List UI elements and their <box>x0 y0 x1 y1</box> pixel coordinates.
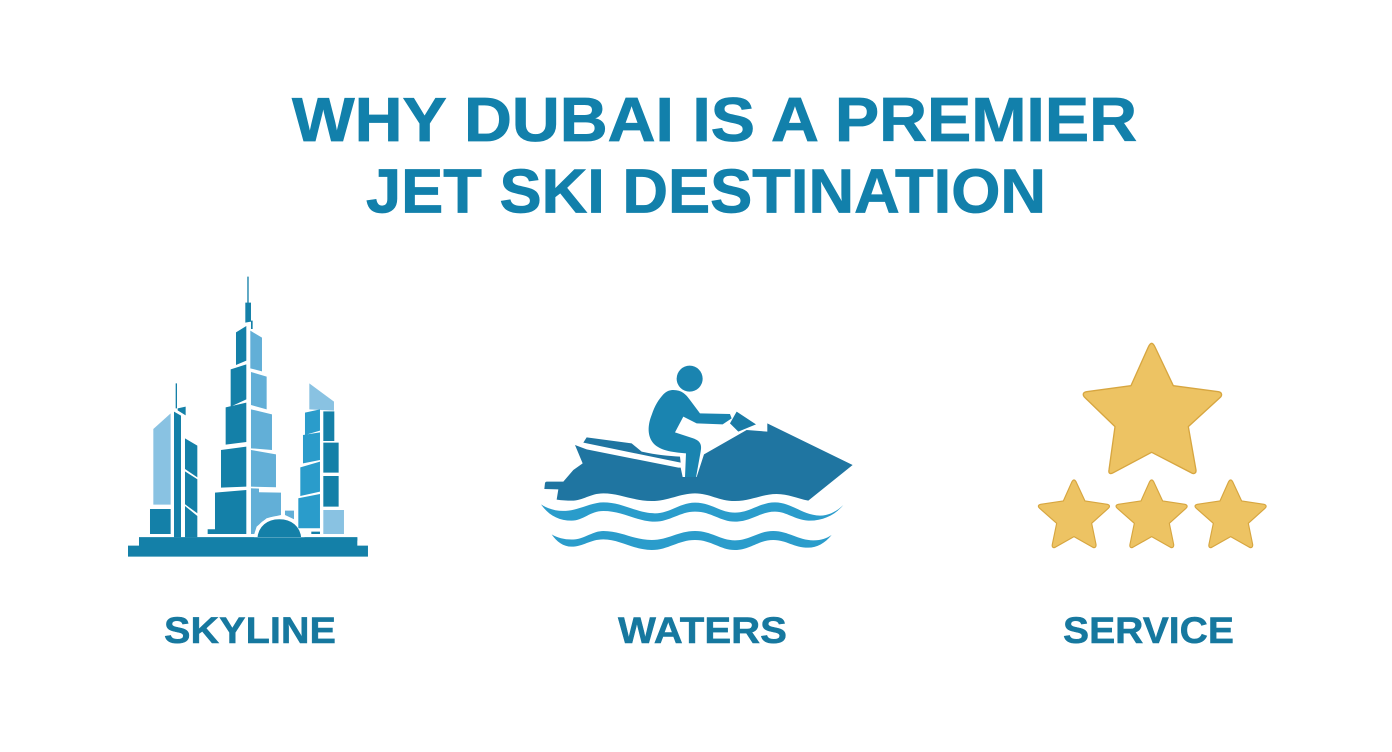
small star middle <box>1116 480 1187 548</box>
wave two <box>552 531 832 550</box>
label: skyline: SKYLINE <box>164 609 336 651</box>
icon: stars <box>1038 343 1266 548</box>
small star right <box>1195 480 1266 548</box>
title: JET SKI DESTINATION <box>366 158 1046 226</box>
label: waters: WATERS <box>618 609 787 651</box>
icon: jet ski rider <box>541 366 853 550</box>
seat <box>583 437 681 463</box>
rider body <box>649 390 732 478</box>
title <box>292 86 1137 226</box>
wave one <box>541 502 843 522</box>
hull <box>544 423 853 501</box>
small star left <box>1038 480 1109 548</box>
title: WHY DUBAI IS A PREMIER <box>292 86 1137 155</box>
label: service: SERVICE <box>1063 609 1234 651</box>
rider head <box>677 366 703 392</box>
icon: skyline <box>128 277 368 557</box>
handlebar <box>730 412 756 432</box>
large star <box>1083 343 1222 474</box>
